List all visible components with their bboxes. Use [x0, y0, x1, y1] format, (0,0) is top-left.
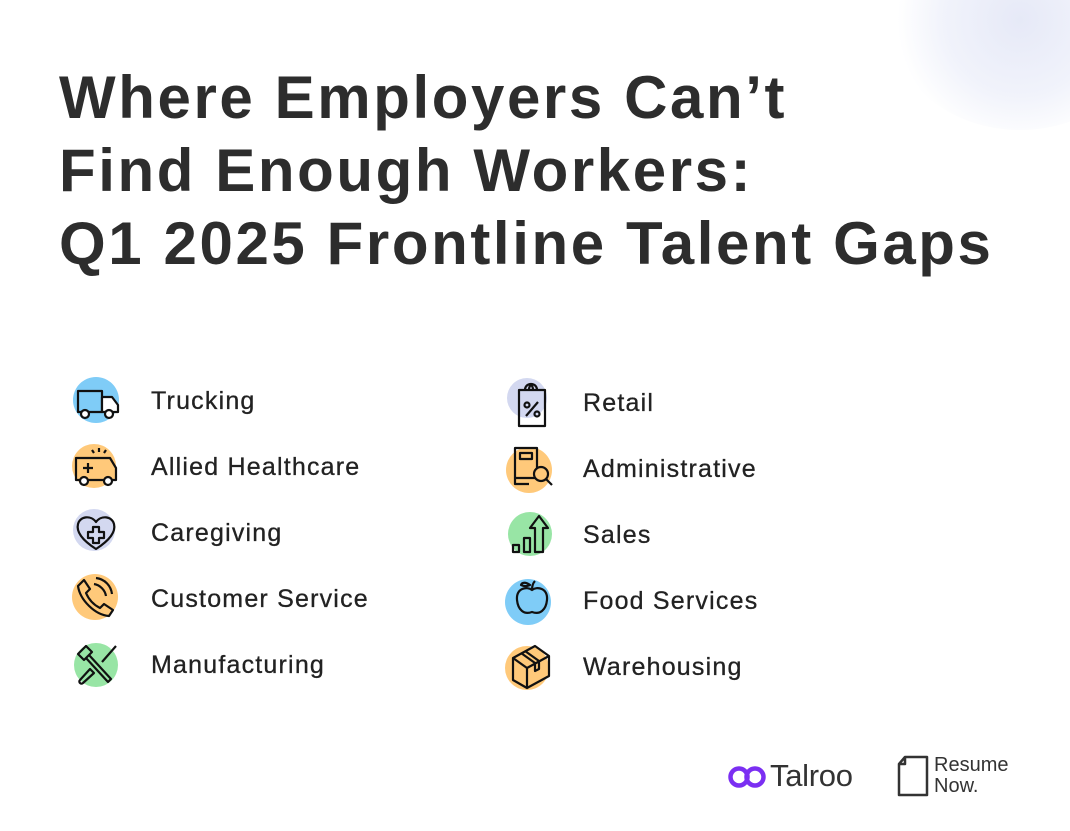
- item: Warehousing: [505, 644, 743, 690]
- logo: Resume Now: Resume: [934, 754, 1008, 776]
- item: Sales: Sales: [583, 521, 652, 549]
- item: Allied Healthcare: Allied Healthcare: [151, 453, 360, 481]
- item: Caregiving: [73, 509, 283, 551]
- item: Food Services: [505, 579, 758, 625]
- item: Trucking: [73, 377, 256, 423]
- item: Trucking: Trucking: [151, 387, 256, 415]
- title: Q1 2025 Frontline Talent Gaps: [59, 210, 994, 277]
- item: Sales: [508, 512, 652, 556]
- item: Administrative: [506, 446, 757, 493]
- item: Manufacturing: Manufacturing: [151, 651, 325, 679]
- item: Customer Service: Customer Service: [151, 585, 369, 613]
- logo: Resume Now: [898, 754, 1008, 797]
- item: Warehousing: Warehousing: [583, 653, 743, 681]
- item: Customer Service: [72, 574, 369, 620]
- item: Administrative: Administrative: [583, 455, 757, 483]
- item: Retail: [507, 378, 654, 428]
- title: [59, 64, 994, 277]
- logo: Resume Now: Now.: [934, 775, 978, 797]
- logo: Talroo: Talroo: [770, 758, 853, 793]
- item: Manufacturing: [74, 643, 325, 687]
- title: Where Employers Can’t: [59, 64, 787, 131]
- title: Find Enough Workers:: [59, 137, 753, 204]
- item: Retail: Retail: [583, 389, 654, 417]
- logo: Talroo: [728, 758, 853, 793]
- item: Food Services: Food Services: [583, 587, 758, 615]
- item: Caregiving: Caregiving: [151, 519, 283, 547]
- item: Allied Healthcare: [72, 444, 360, 488]
